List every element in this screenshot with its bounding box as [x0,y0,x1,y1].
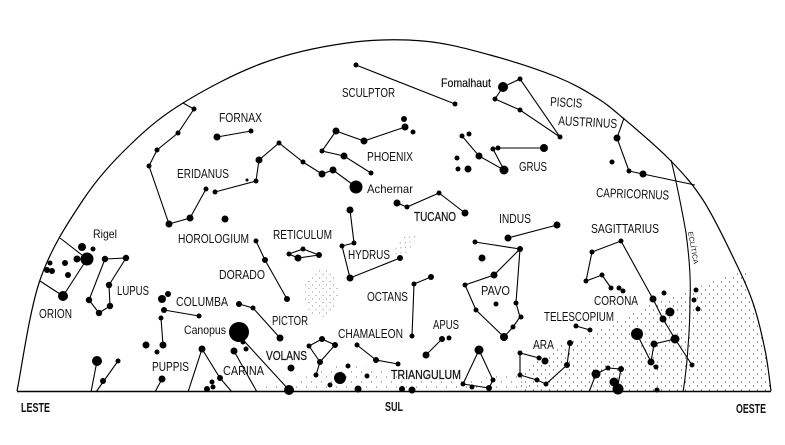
constellation: Puppis [155,376,166,392]
label: Sculptor: SCULPTOR [342,85,395,100]
label: Octans: OCTANS [367,289,408,304]
constellation: Eridanus [146,103,362,228]
constellation: Ara [518,340,573,386]
constellation: Telescopium [574,324,592,332]
constellation: Reticulum [286,246,322,262]
label: Puppis: PUPPIS [152,359,189,374]
constellation: Piscis Austrinus [492,76,562,140]
label: Piscis: PISCIS [550,94,583,111]
stars along the southern horizon [328,364,416,394]
label: Austrinus: AUSTRINUS [558,113,618,131]
constellation: Columba [142,291,202,354]
label: Horologium: HOROLOGIUM [178,231,249,246]
label: Pictor: PICTOR [272,313,308,328]
label: Pavo: PAVO [481,283,510,298]
constellation: Lupus [86,255,129,316]
label: west: OESTE [736,401,766,416]
label: south: SUL [385,399,403,414]
label: Dorado: DORADO [219,267,265,282]
label: Canopus: Canopus [184,323,226,337]
constellation: Capricornus [610,118,695,185]
label: Ara: ARA [533,337,554,352]
constellation: Carina [188,322,294,395]
labels [21,76,766,416]
label: east: LESTE [21,400,50,415]
constellation: Fornax [214,128,254,140]
constellation: Tucano [394,190,468,216]
constellation: Chamaleon [354,342,400,366]
constellation: Sculptor [354,62,458,106]
label: Hydrus: HYDRUS [348,247,390,262]
constellation: Pictor [236,301,284,342]
constellation: Octans [410,274,434,338]
label: Orion: ORION [39,306,72,321]
label: Sagittarius: SAGITTARIUS [591,221,659,236]
constellation: Indus [504,222,560,242]
label: Tucano: TUCANO [414,209,456,224]
constellation: Pavo [462,240,524,341]
label: Phoenix: PHOENIX [367,149,413,164]
label: Fomalhaut: Fomalhaut [441,76,492,90]
label: Telescopium: TELESCOPIUM [544,309,614,324]
constellation: Orion [40,238,96,301]
stippled band: milky way [232,230,771,392]
label: Triangulum: TRIANGULUM [391,367,461,382]
label: Volans: VOLANS [266,348,307,363]
constellation: lower left stars [91,356,120,392]
label: Lupus: LUPUS [117,283,149,298]
constellation: Volans [288,336,338,378]
constellation: Grus [454,132,548,174]
label: Achernar: Achernar [367,182,413,196]
constellation: Sagittarius [584,238,700,370]
label: Rigel: Rigel [93,227,117,241]
label: Eridanus: ERIDANUS [177,166,229,181]
label: Apus: APUS [433,317,459,332]
label: Indus: INDUS [499,211,531,226]
label: Fornax: FORNAX [219,110,262,125]
sky dome outline [17,40,771,391]
label: Reticulum: RETICULUM [273,227,332,242]
label: Carina: CARINA [223,363,264,378]
constellation: Triangulum [460,346,496,391]
label: Corona: CORONA [594,293,638,308]
label: Capricornus: CAPRICORNUS [596,185,670,203]
ecliptic line [671,160,690,392]
constellation: Dorado [254,238,290,302]
constellation: Hydrus [340,206,403,282]
label: Chamaleon: CHAMALEON [338,326,403,341]
horizon line [17,390,771,392]
constellation: Apus [422,336,452,358]
label: Ecliptic: ECLÍTICA [686,231,701,265]
label: Columba: COLUMBA [176,294,228,309]
constellation: Phoenix [320,116,416,176]
label: Grus: GRUS [519,159,547,174]
constellation: bottom right cluster [589,366,660,394]
